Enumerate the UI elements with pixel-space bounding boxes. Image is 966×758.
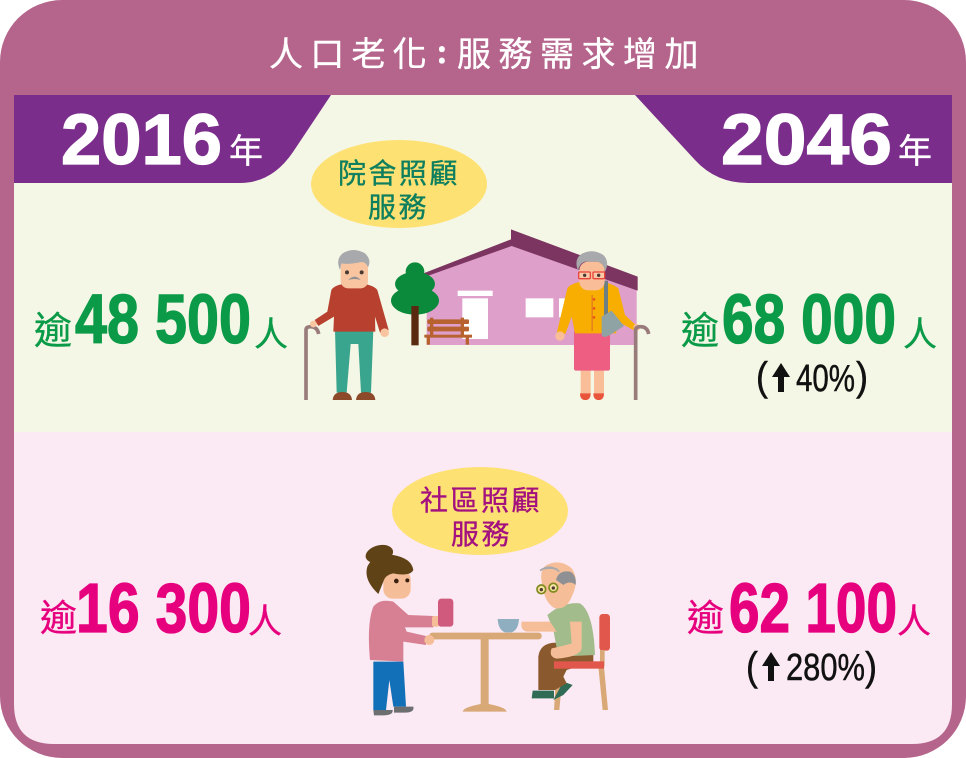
icon: bowl <box>498 619 519 632</box>
stat: 2046 community care: 62 100 <box>729 569 897 647</box>
icon: elderly woman with bag and cane <box>555 251 649 400</box>
change: residential care up 40%: ) <box>856 355 868 399</box>
stat: 2046 community care: 逾 <box>687 588 724 642</box>
callout: community care services <box>392 467 568 555</box>
illustration: care home with elderly couple <box>306 229 649 400</box>
illustration: carer serving elderly man at table <box>364 542 610 715</box>
callout: residential care services <box>311 140 487 228</box>
stat: 2016 residential care: 逾 <box>34 300 72 355</box>
title: 人口老化 <box>269 27 434 76</box>
icon: house <box>423 229 638 345</box>
stat: 2046 residential care: 人 <box>903 307 937 356</box>
icon: table <box>429 633 542 712</box>
panel: residential care <box>14 95 952 432</box>
title <box>269 27 706 76</box>
stat: 2016 community care: 逾 <box>40 588 77 642</box>
stat: 2016 residential care: 人 <box>254 307 288 356</box>
stat: 2016 community care: 人 <box>248 594 282 643</box>
icon: carer <box>364 542 453 715</box>
callout: community care services: 服務 <box>451 513 512 553</box>
icon: elderly man <box>521 562 604 700</box>
change: community care up 280%: 280% <box>786 647 865 689</box>
title: 服務需求增加 <box>457 27 706 76</box>
callout: residential care services: 院舍照顧 <box>338 152 460 192</box>
banner: 2046 <box>635 95 952 183</box>
icon: elderly man with cane <box>306 250 389 400</box>
panel: community care <box>14 432 952 744</box>
banner: 2016 <box>14 95 331 183</box>
banner: 2046: 2046 <box>721 101 892 180</box>
stat: 2046 community care: 人 <box>897 594 931 643</box>
change: residential care up 40%: 40% <box>796 358 855 400</box>
change: community care up 280%: ( <box>746 645 759 689</box>
title: : <box>437 28 447 72</box>
change: community care up 280%: ) <box>865 645 877 689</box>
callout: residential care services: 服務 <box>368 186 429 226</box>
stat: 2046 residential care: 逾 <box>681 300 719 355</box>
banner: 2016: 2016 <box>61 101 222 180</box>
change: residential care up 40%: ( <box>756 355 769 399</box>
change: residential care up 40% <box>756 355 868 400</box>
icon: chair <box>554 614 610 710</box>
banner: 2016: 年 <box>229 124 263 173</box>
callout: community care services: 社區照顧 <box>420 479 542 519</box>
stat: 2046 residential care: 68 000 <box>722 280 896 358</box>
icon: tree <box>391 262 439 345</box>
banner: 2046: 年 <box>898 124 932 173</box>
stat: 2016 residential care: 48 500 <box>75 280 251 358</box>
stat: 2016 community care: 16 300 <box>76 569 251 647</box>
icon: bench <box>424 318 472 345</box>
change: community care up 280% <box>746 645 877 689</box>
